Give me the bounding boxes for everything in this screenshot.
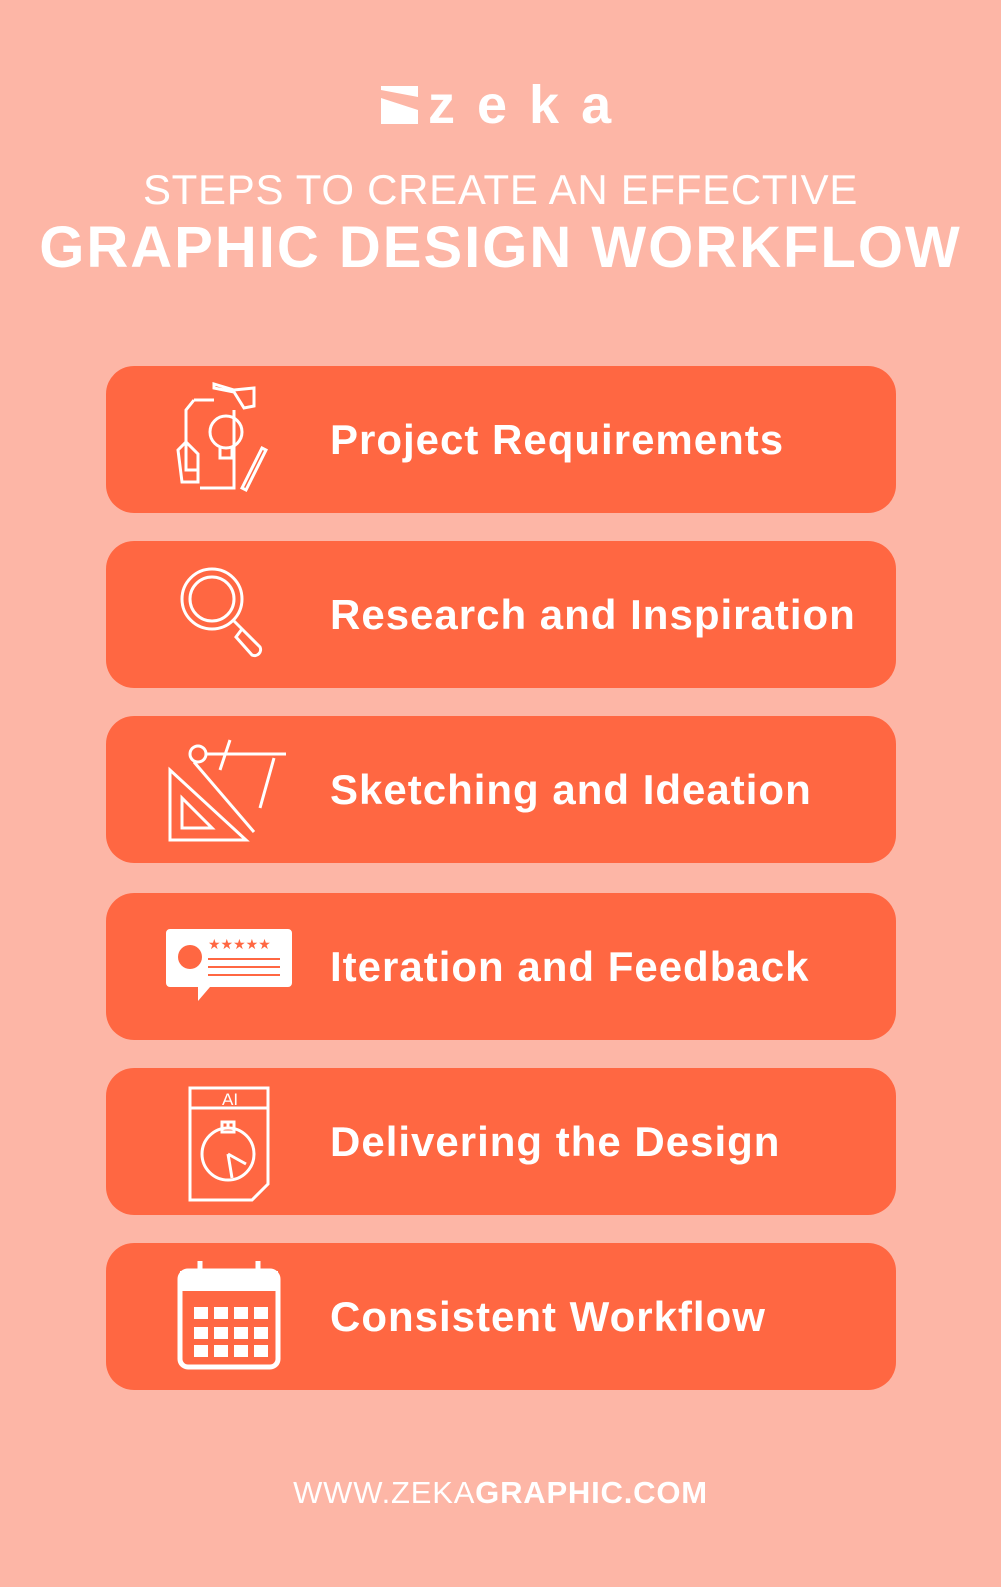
card: consistent [106, 1243, 896, 1390]
icon: magnifier [180, 568, 262, 658]
card: iteration [106, 893, 896, 1040]
icon: hands lightbulb [176, 382, 268, 492]
icon: AI file: AI [222, 1090, 238, 1109]
card: project requirements: Project Requirements [330, 416, 784, 463]
card: sketching [106, 716, 896, 863]
card: consistent: Consistent Workflow [330, 1293, 766, 1340]
subtitle: STEPS TO CREATE AN EFFECTIVE [143, 166, 858, 213]
card: delivering: Delivering the Design [330, 1118, 780, 1165]
card: research [106, 541, 896, 688]
icon: compass ruler [168, 740, 286, 842]
icon: review bubble: ★★★★★ [208, 936, 271, 952]
icon: calendar [178, 1261, 280, 1370]
icon: review bubble [166, 929, 292, 1001]
title: GRAPHIC DESIGN WORKFLOW [39, 215, 962, 280]
card: sketching: Sketching and Ideation [330, 766, 812, 813]
card: delivering [106, 1068, 896, 1215]
icon: AI file [188, 1086, 270, 1202]
card: project requirements [106, 366, 896, 513]
card: iteration: Iteration and Feedback [330, 943, 809, 990]
card: research: Research and Inspiration [330, 591, 856, 638]
footer url: WWW.ZEKAGRAPHIC.COM [293, 1475, 708, 1510]
